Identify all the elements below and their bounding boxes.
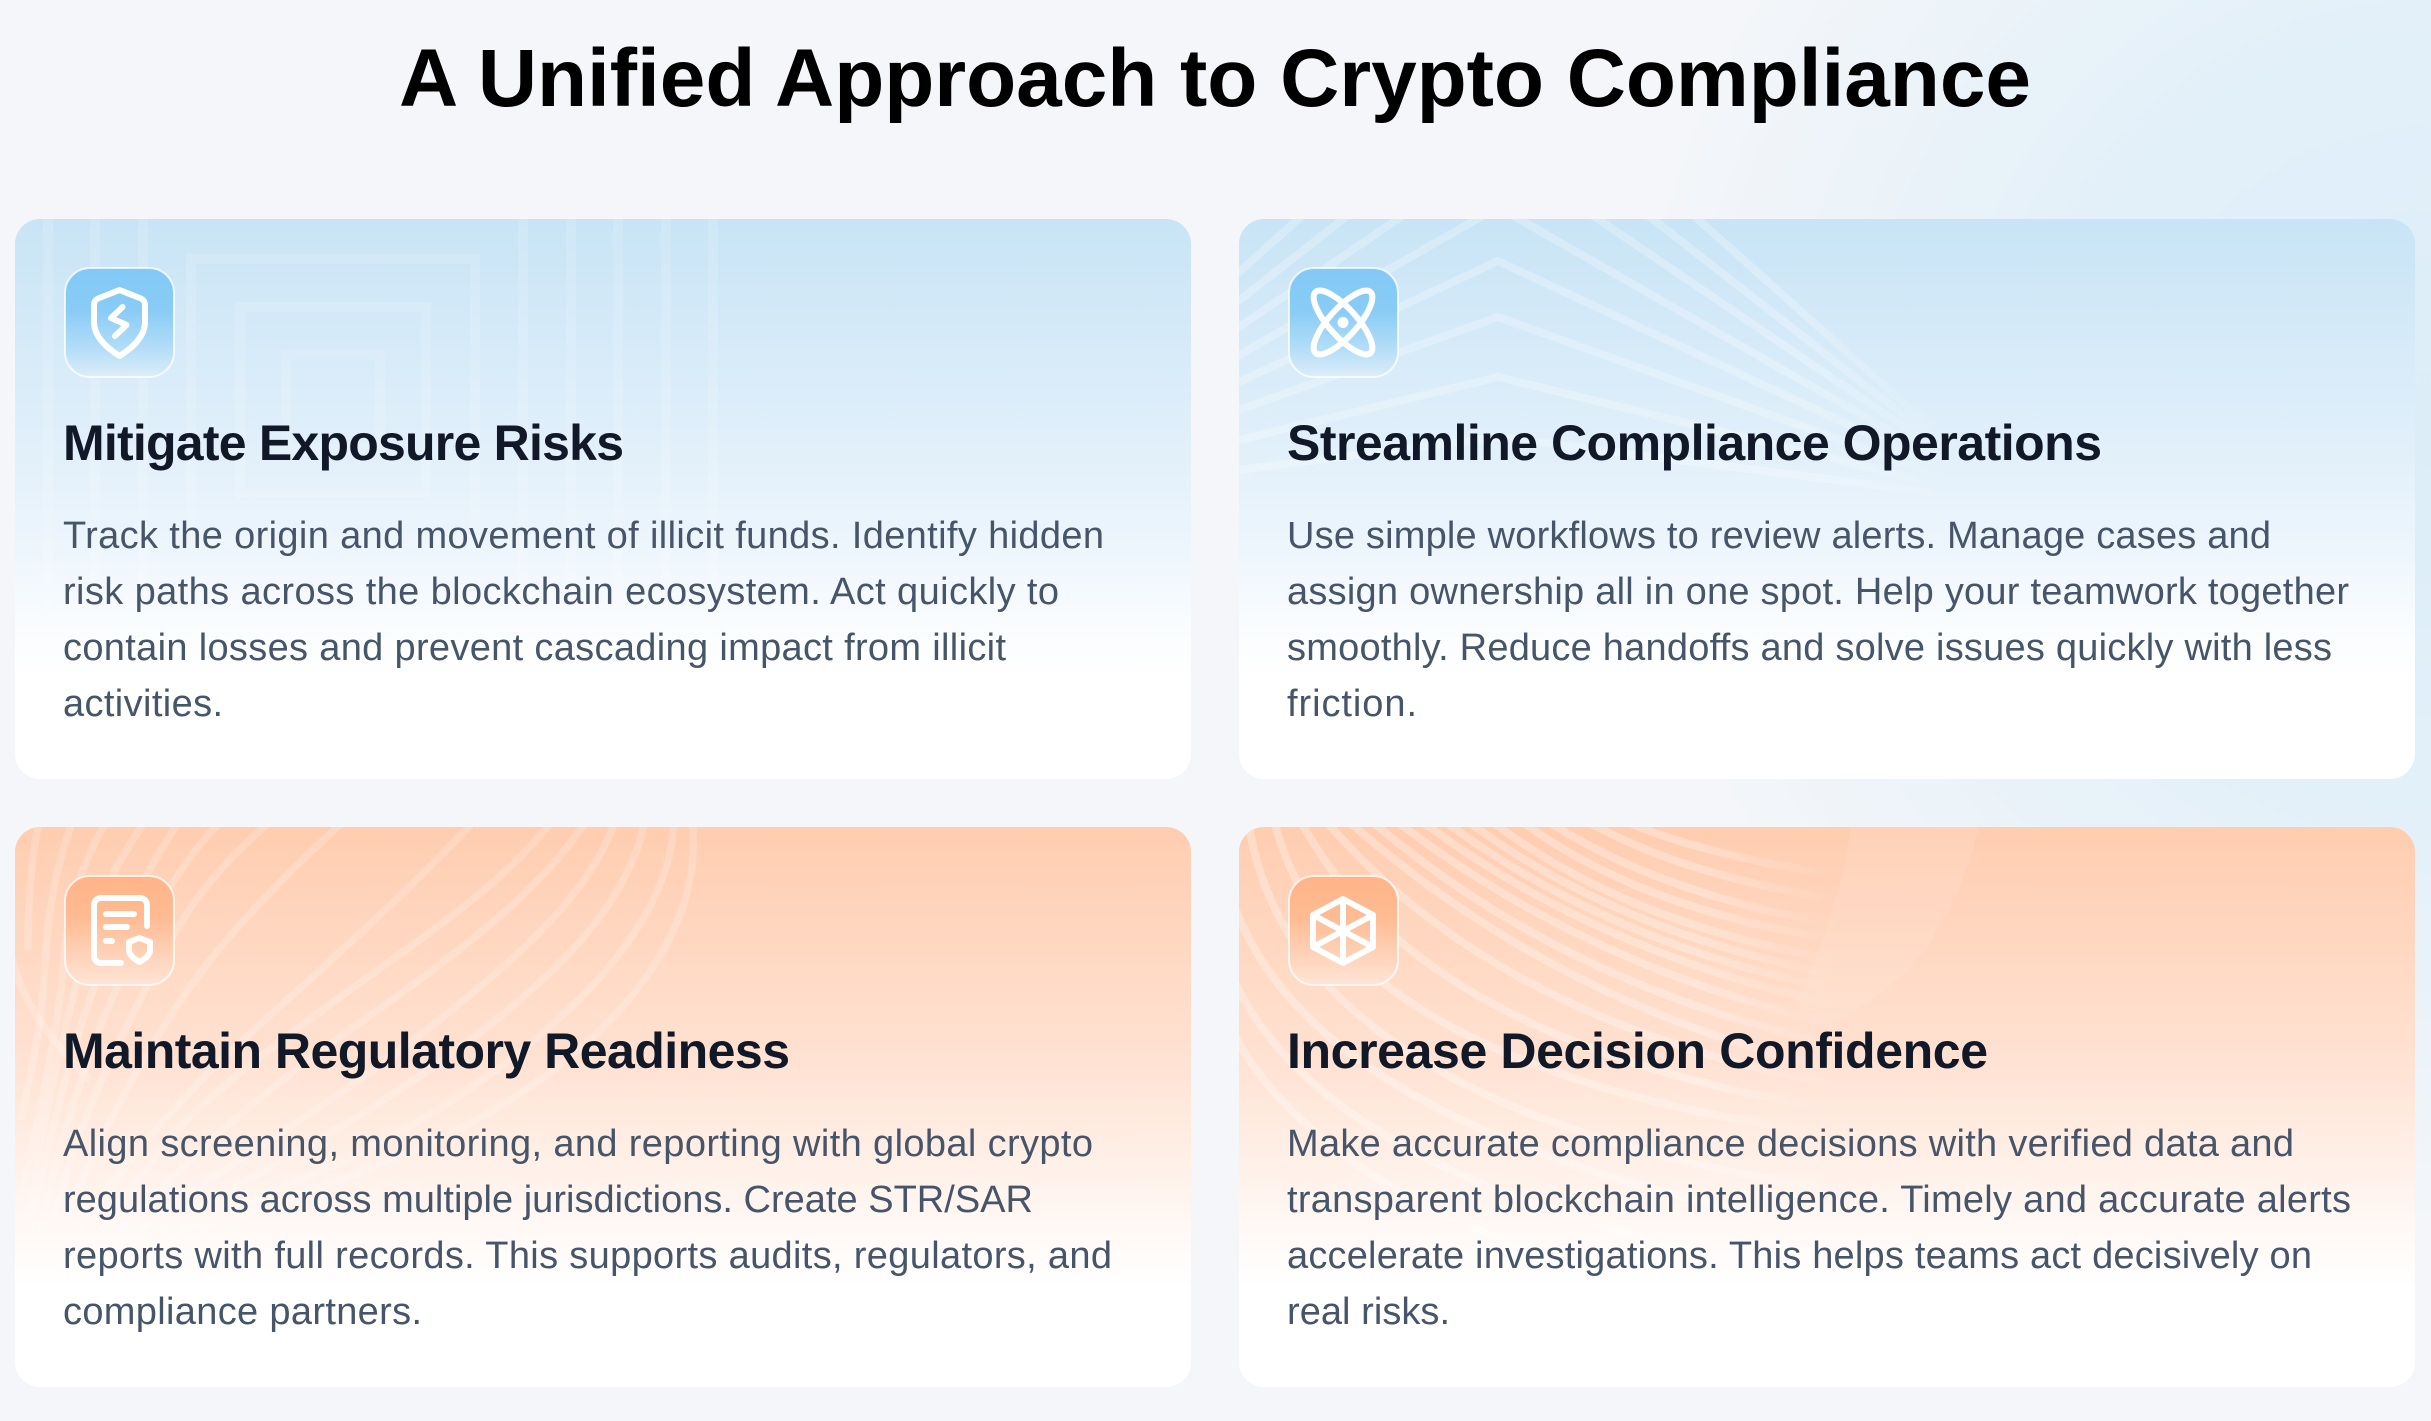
icon: atom — [1289, 268, 1398, 377]
body text — [1287, 1123, 2351, 1333]
body text: real risks. — [1287, 1291, 1450, 1333]
body text: Use simple workflows to review alerts. Manage cases and — [1287, 515, 2271, 557]
panel: Increase Decision Confidence — [1222, 820, 2415, 1387]
body text: regulations across multiple jurisdictions. Create STR/SAR — [63, 1179, 1033, 1221]
body text: smoothly. Reduce handoffs and solve issues quickly with less — [1287, 627, 2332, 669]
icon: shield with bolt — [65, 268, 174, 377]
body text — [63, 515, 1104, 725]
body text: Make accurate compliance decisions with verified data and — [1287, 1123, 2294, 1165]
icon: hexagonal cube — [1289, 876, 1398, 985]
body text: Track the origin and movement of illicit funds. Identify hidden — [63, 515, 1104, 557]
heading: Increase Decision Confidence — [1287, 1023, 1988, 1079]
body text: activities. — [63, 683, 223, 725]
body text: reports with full records. This supports audits, regulators, and — [63, 1235, 1112, 1277]
body text: accelerate investigations. This helps teams act decisively on — [1287, 1235, 2312, 1277]
body text: Align screening, monitoring, and reporting with global crypto — [63, 1123, 1093, 1165]
body text: risk paths across the blockchain ecosystem. Act quickly to — [63, 571, 1059, 613]
title: A Unified Approach to Crypto Compliance — [399, 33, 2031, 124]
body text: compliance partners. — [63, 1291, 422, 1333]
body text — [1287, 515, 2349, 725]
icon: document with shield — [65, 876, 174, 985]
heading: Streamline Compliance Operations — [1287, 415, 2102, 471]
body text: assign ownership all in one spot. Help your teamwork together — [1287, 571, 2349, 613]
panel: Streamline Compliance Operations — [1239, 219, 2415, 779]
body text: friction. — [1287, 683, 1417, 725]
body text: contain losses and prevent cascading impact from illicit — [63, 627, 1006, 669]
body text — [63, 1123, 1112, 1333]
panel: Mitigate Exposure Risks — [15, 219, 1191, 779]
body text: transparent blockchain intelligence. Timely and accurate alerts — [1287, 1179, 2351, 1221]
panel: Maintain Regulatory Readiness — [10, 820, 1191, 1387]
heading: Maintain Regulatory Readiness — [63, 1023, 790, 1079]
heading: Mitigate Exposure Risks — [63, 415, 624, 471]
